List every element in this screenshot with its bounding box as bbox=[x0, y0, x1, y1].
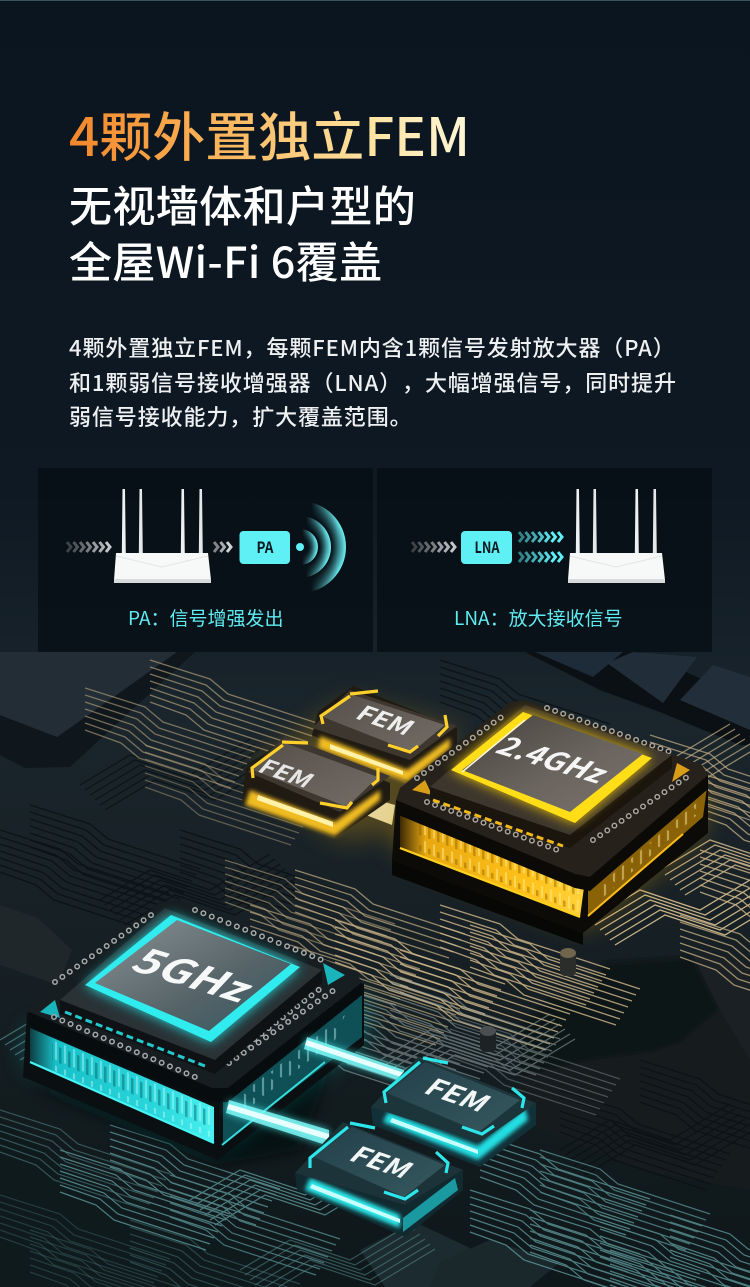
FEM upper: FEM bbox=[416, 1070, 501, 1119]
panel: PA bbox=[38, 468, 373, 652]
base bbox=[23, 982, 364, 1160]
chip label: 5GHz bbox=[120, 936, 270, 1012]
glow bbox=[400, 785, 705, 925]
raised block bbox=[60, 908, 322, 1060]
PA caption: PA：信号增强发出 bbox=[128, 604, 284, 631]
plate corner lights bbox=[40, 1000, 60, 1018]
icon: router bbox=[114, 489, 211, 583]
subtitle: 无视墙体和户型的 bbox=[69, 173, 416, 235]
title: 4颗外置独立FEM bbox=[69, 96, 470, 172]
glowing ring bbox=[85, 915, 300, 1042]
panel: LNA bbox=[377, 468, 712, 652]
FEM upper bbox=[371, 1057, 536, 1167]
FEM lower: FEM bbox=[342, 1137, 424, 1184]
mixed grey traces bbox=[290, 975, 620, 1115]
body text: 弱信号接收能力，扩大覆盖范围。 bbox=[69, 400, 413, 432]
chip surface bbox=[95, 920, 291, 1031]
cyan traces bbox=[0, 994, 750, 1287]
glowing ring bbox=[451, 712, 652, 823]
raised block bbox=[430, 705, 672, 835]
pins bbox=[417, 708, 687, 852]
subtitle bbox=[69, 173, 416, 291]
2.4GHz chip bbox=[392, 700, 708, 945]
FEM upper bbox=[312, 686, 457, 782]
FEM lower bbox=[242, 736, 390, 837]
icon: input chevrons bbox=[412, 542, 455, 552]
FEM upper: FEM bbox=[349, 698, 423, 741]
subtitle: 全屋Wi-Fi 6覆盖 bbox=[69, 229, 382, 291]
body text: 和1颗弱信号接收增强器（LNA），大幅增强信号，同时提升 bbox=[69, 366, 677, 398]
icon: signal waves bbox=[296, 503, 346, 591]
LNA badge bbox=[461, 531, 512, 564]
glass right bbox=[588, 787, 707, 917]
icon: chevrons to PA bbox=[214, 542, 231, 552]
shadow bbox=[25, 1070, 330, 1165]
glow bbox=[250, 700, 460, 840]
glass front bbox=[30, 1028, 214, 1143]
base bbox=[392, 775, 708, 933]
icon: amplified chevrons bbox=[519, 532, 562, 562]
LNA badge: LNA bbox=[474, 535, 500, 558]
top plate bbox=[396, 700, 708, 877]
circuit board background bbox=[0, 652, 750, 1287]
link between FEM and chip bbox=[358, 795, 395, 825]
body text bbox=[69, 331, 682, 970]
chip surface bbox=[462, 715, 643, 812]
yellow FEM chips bbox=[242, 686, 460, 840]
cyan FEM chips bbox=[295, 1057, 536, 1237]
body text: 4颗外置独立FEM，每颗FEM内含1颗信号发射放大器（PA） bbox=[69, 331, 676, 363]
FEM lower: FEM bbox=[252, 751, 323, 793]
chip label: 2.4GHz bbox=[488, 727, 621, 790]
glass right bbox=[223, 993, 362, 1143]
glass edge lights bbox=[400, 848, 580, 917]
capacitors bbox=[480, 948, 576, 1052]
top plate bbox=[29, 900, 362, 1088]
dark engraved traces bbox=[0, 660, 750, 1190]
cyan links bbox=[226, 1037, 404, 1146]
PA badge bbox=[240, 531, 290, 564]
pins bbox=[54, 910, 337, 1077]
icon: input chevrons bbox=[67, 542, 110, 552]
plate corner lights bbox=[412, 780, 432, 795]
glass front bbox=[400, 813, 585, 917]
FEM lower bbox=[295, 1122, 463, 1237]
PA badge: PA bbox=[257, 536, 274, 558]
board raised blocks bbox=[0, 652, 750, 1287]
icon: router bbox=[568, 489, 665, 583]
gold traces bbox=[85, 660, 750, 1050]
glow bbox=[30, 993, 362, 1143]
5GHz chip bbox=[23, 900, 364, 1165]
LNA caption: LNA：放大接收信号 bbox=[454, 604, 623, 631]
